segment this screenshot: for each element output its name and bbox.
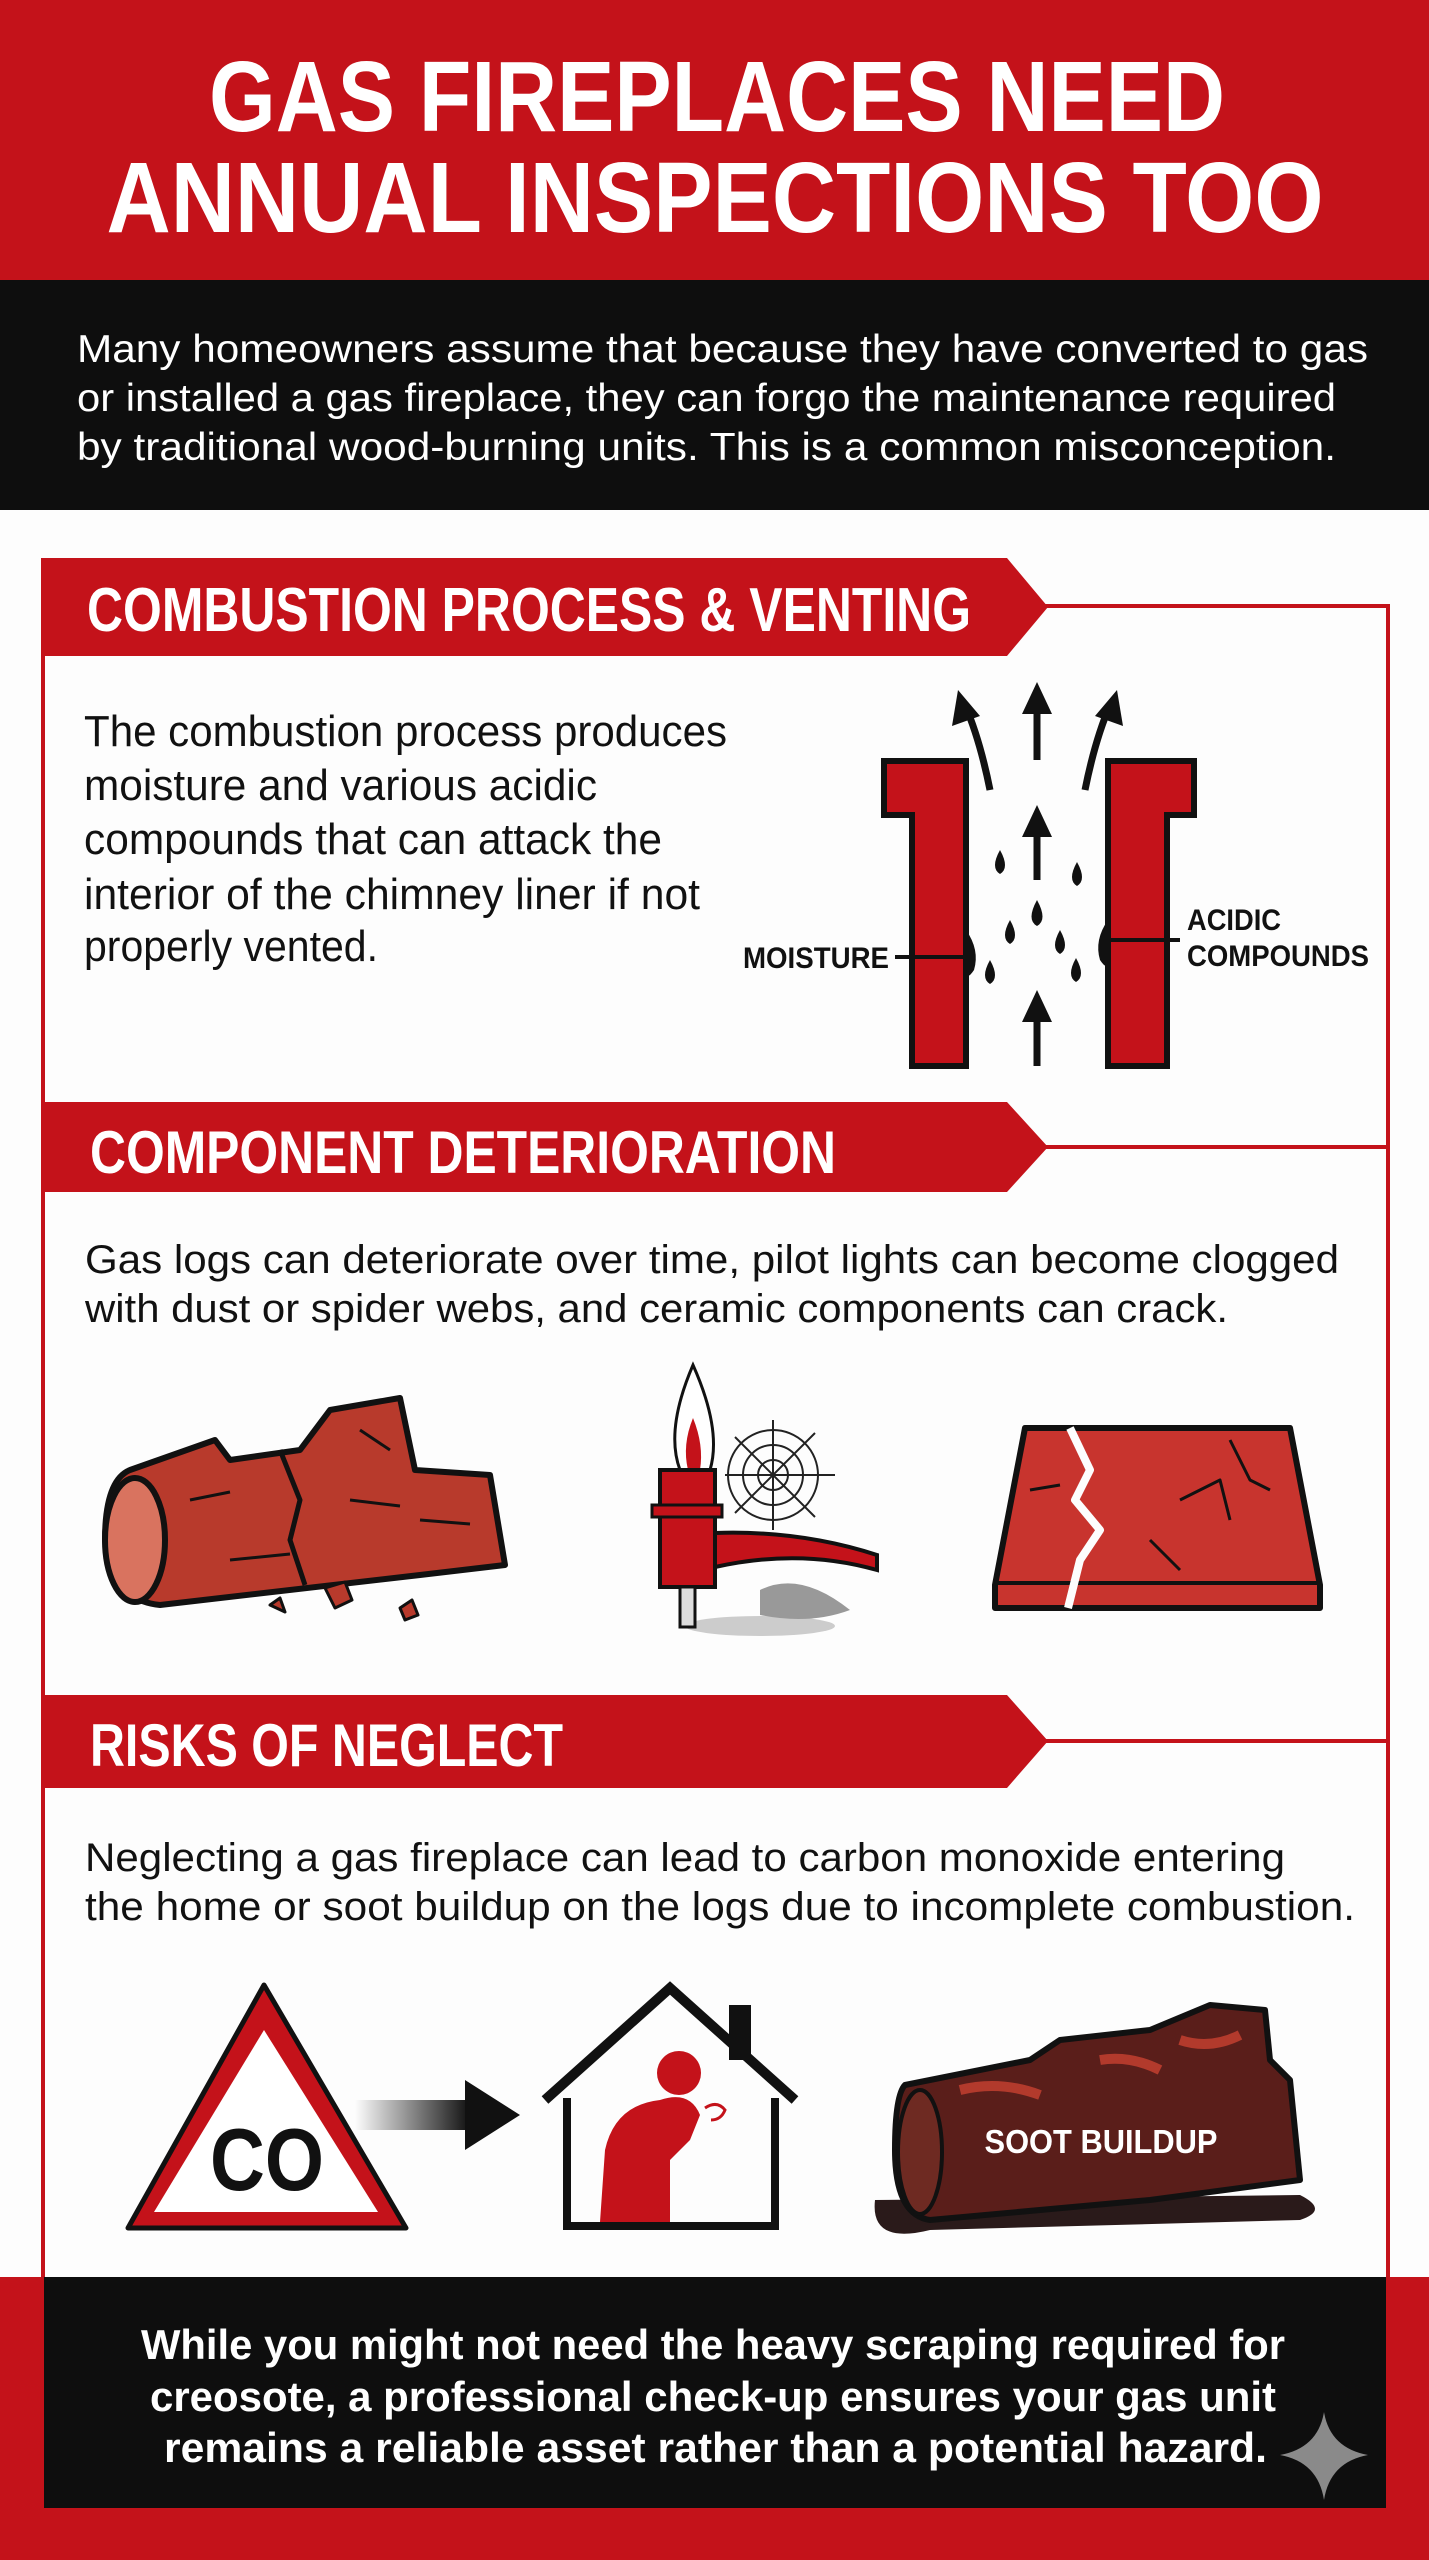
label: acidic compounds xyxy=(1187,904,1369,973)
text: combustion: properly vented. xyxy=(84,922,378,971)
text: deterioration xyxy=(84,1238,1339,1331)
footer band: remains a reliable asset rather than a potential hazard. xyxy=(164,2424,1267,2471)
icon: clogged pilot light xyxy=(652,1365,877,1636)
footer band: While you might not need the heavy scraping required for xyxy=(141,2321,1285,2368)
title band: GAS FIREPLACES NEED xyxy=(209,41,1225,153)
label: acidic compounds: COMPOUNDS xyxy=(1187,940,1369,973)
panel outline xyxy=(43,606,1388,2306)
text: deterioration: with dust or spider webs, and ceramic components can crack. xyxy=(84,1287,1228,1331)
icon: chimney xyxy=(884,682,1194,1066)
header: combustion: COMBUSTION PROCESS & VENTING xyxy=(87,576,971,645)
intro band xyxy=(0,280,1429,510)
intro band: Many homeowners assume that because they have converted to gas xyxy=(77,328,1368,371)
text: risks: the home or soot buildup on the logs due to incomplete combustion. xyxy=(85,1885,1355,1929)
label: moisture: MOISTURE xyxy=(743,942,889,975)
text: combustion: interior of the chimney liner if not xyxy=(84,870,700,919)
header: risks of neglect xyxy=(41,1695,1048,1788)
icon: house with coughing person xyxy=(545,1988,795,2226)
text: combustion: compounds that can attack the xyxy=(84,815,662,864)
intro band: by traditional wood-burning units. This is a common misconception. xyxy=(77,426,1336,469)
intro band: or installed a gas fireplace, they can forgo the maintenance required xyxy=(77,377,1336,420)
header: combustion xyxy=(41,558,1048,656)
header: component deterioration xyxy=(41,1102,1048,1192)
icon: soot log xyxy=(875,2005,1315,2234)
footer band: creosote, a professional check-up ensures your gas unit xyxy=(150,2373,1276,2420)
icon: cracked ceramic tile xyxy=(995,1428,1320,1608)
header: component deterioration: COMPONENT DETERIORATION xyxy=(90,1119,836,1186)
text: risks: Neglecting a gas fireplace can lead to carbon monoxide entering xyxy=(85,1836,1285,1880)
label: acidic compounds: ACIDIC xyxy=(1187,904,1281,937)
icon: CO warning xyxy=(128,1985,406,2228)
text: combustion: The combustion process produces xyxy=(84,707,727,756)
text: risks xyxy=(85,1836,1355,1929)
title band xyxy=(0,0,1429,280)
icon: CO warning: CO xyxy=(210,2110,324,2209)
text: combustion xyxy=(84,707,727,971)
arrow: CO to home xyxy=(355,2080,520,2150)
icon: cracked log xyxy=(105,1398,505,1620)
text: combustion: moisture and various acidic xyxy=(84,761,597,810)
header: risks of neglect: RISKS OF NEGLECT xyxy=(90,1712,563,1779)
icon: sparkle xyxy=(1280,2412,1368,2500)
footer band xyxy=(0,2277,1429,2560)
icon: soot log: SOOT BUILDUP xyxy=(984,2123,1218,2160)
text: deterioration: Gas logs can deteriorate over time, pilot lights can become clogged xyxy=(85,1238,1339,1282)
